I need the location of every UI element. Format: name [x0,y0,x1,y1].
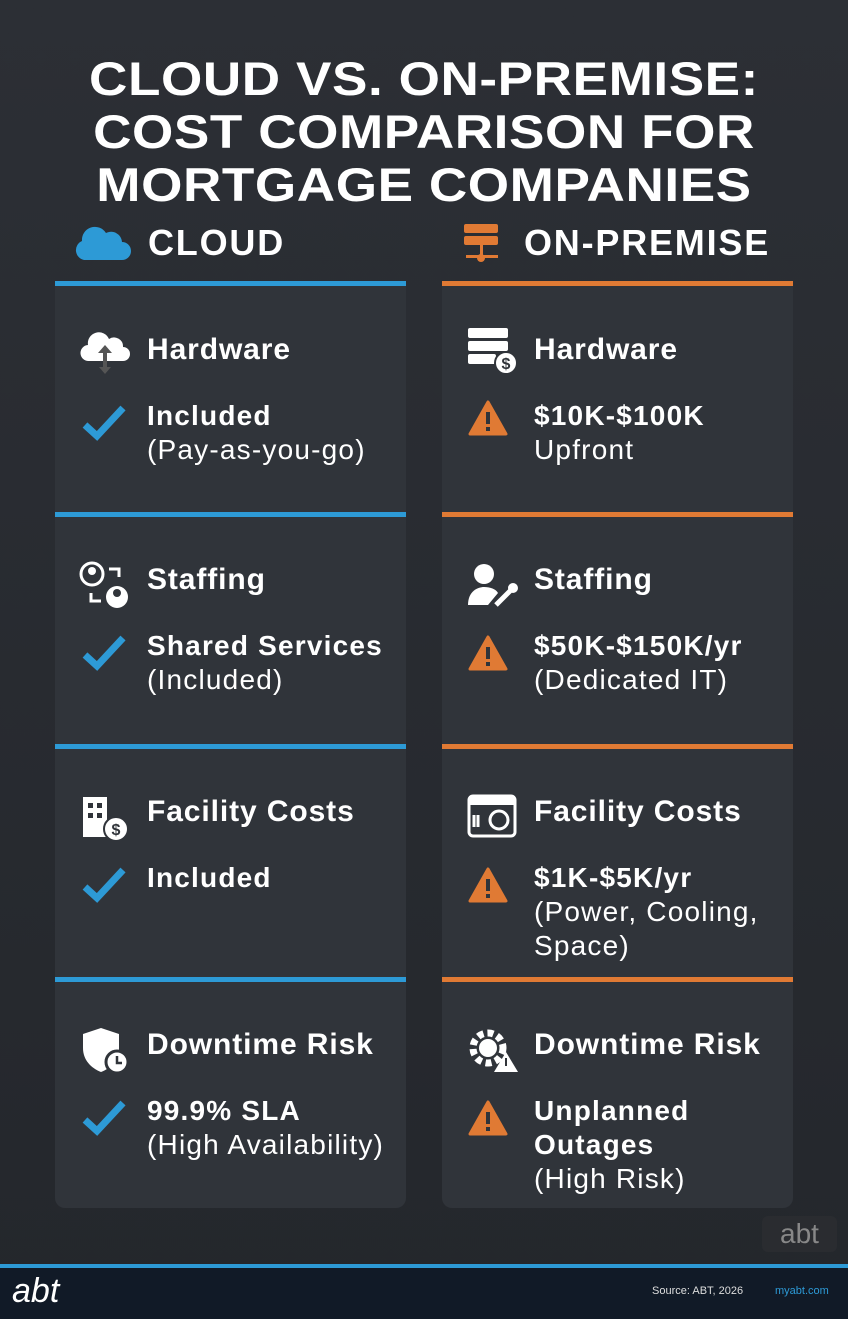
cloud downtime: (High Availability) [147,1129,384,1160]
cloud facility [82,795,355,903]
onprem downtime: Outages [534,1129,654,1160]
panel: cloud [55,281,406,1208]
cloud staffing: Shared Services [147,630,383,661]
onprem staffing: $50K-$150K/yr [534,630,743,661]
onprem facility: Space) [534,930,630,961]
source text: Source: ABT, 2026 [652,1285,743,1297]
cloud facility: Facility Costs [147,795,355,828]
onprem staffing [468,563,743,695]
footer [0,1264,848,1319]
title: COST COMPARISON FOR [93,105,755,158]
onprem downtime [468,1028,761,1194]
onprem staffing: (Dedicated IT) [534,664,728,695]
onprem downtime: (High Risk) [534,1163,686,1194]
title: MORTGAGE COMPANIES [96,158,752,211]
panel: on-premise [442,281,793,1208]
onprem hardware: $10K-$100K [534,400,705,431]
onprem downtime: Downtime Risk [534,1028,761,1061]
cloud hardware: Hardware [147,333,291,366]
onprem downtime: Unplanned [534,1095,689,1126]
onprem facility: Facility Costs [534,795,742,828]
url: myabt.com [775,1285,829,1297]
cloud facility: Included [147,862,272,893]
onprem facility: (Power, Cooling, [534,896,759,927]
column header: cloud [76,222,285,263]
cloud hardware: (Pay-as-you-go) [147,434,366,465]
cloud downtime: Downtime Risk [147,1028,374,1061]
onprem hardware [468,328,705,465]
onprem hardware: Upfront [534,434,634,465]
onprem facility [468,794,759,961]
footer logo: abt [12,1272,59,1310]
cloud staffing: Staffing [147,563,266,596]
title [89,52,759,211]
cloud downtime: 99.9% SLA [147,1095,301,1126]
column header: cloud: CLOUD [148,222,285,263]
onprem hardware: $ [502,356,511,373]
cloud hardware: Included [147,400,272,431]
onprem staffing: Staffing [534,563,653,596]
cloud facility: $ [112,822,121,839]
cloud downtime [82,1028,384,1160]
cloud staffing: (Included) [147,664,284,695]
cloud hardware [80,332,366,465]
onprem facility: $1K-$5K/yr [534,862,692,893]
onprem hardware: Hardware [534,333,678,366]
cloud staffing [80,562,383,695]
watermark logo [762,1216,837,1252]
title: CLOUD VS. ON-PREMISE: [89,52,759,105]
watermark logo: abt [780,1218,819,1249]
column header: on-premise: ON-PREMISE [524,222,770,263]
